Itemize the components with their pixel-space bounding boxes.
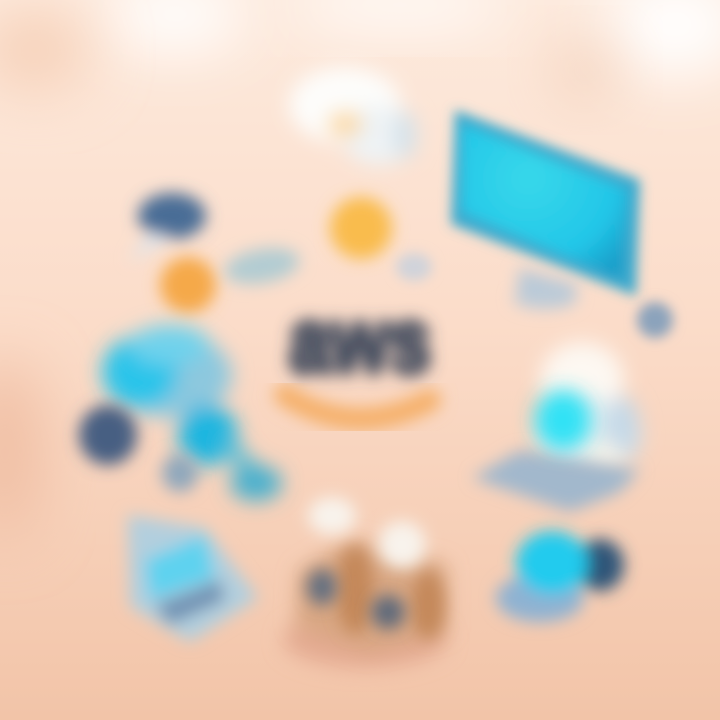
icon: phone with mug xyxy=(496,531,624,622)
icon: orange coin xyxy=(160,257,216,313)
icon: laptop with cloud xyxy=(472,342,642,512)
logo: aws xyxy=(285,290,431,419)
icon: blue server cloud cluster xyxy=(79,325,282,501)
icon: small disc xyxy=(396,253,432,281)
icon: mouse xyxy=(637,302,673,338)
icon: brown boxes with figures xyxy=(283,497,447,668)
icon: cloud with coin xyxy=(289,67,418,165)
icon: gold coin xyxy=(330,197,392,259)
logo: aws: aws xyxy=(289,290,431,392)
icon: desktop monitor xyxy=(451,110,640,309)
icon: speech bubble xyxy=(128,193,206,262)
icon: envelope xyxy=(222,243,302,289)
icon: tablet xyxy=(128,515,258,642)
